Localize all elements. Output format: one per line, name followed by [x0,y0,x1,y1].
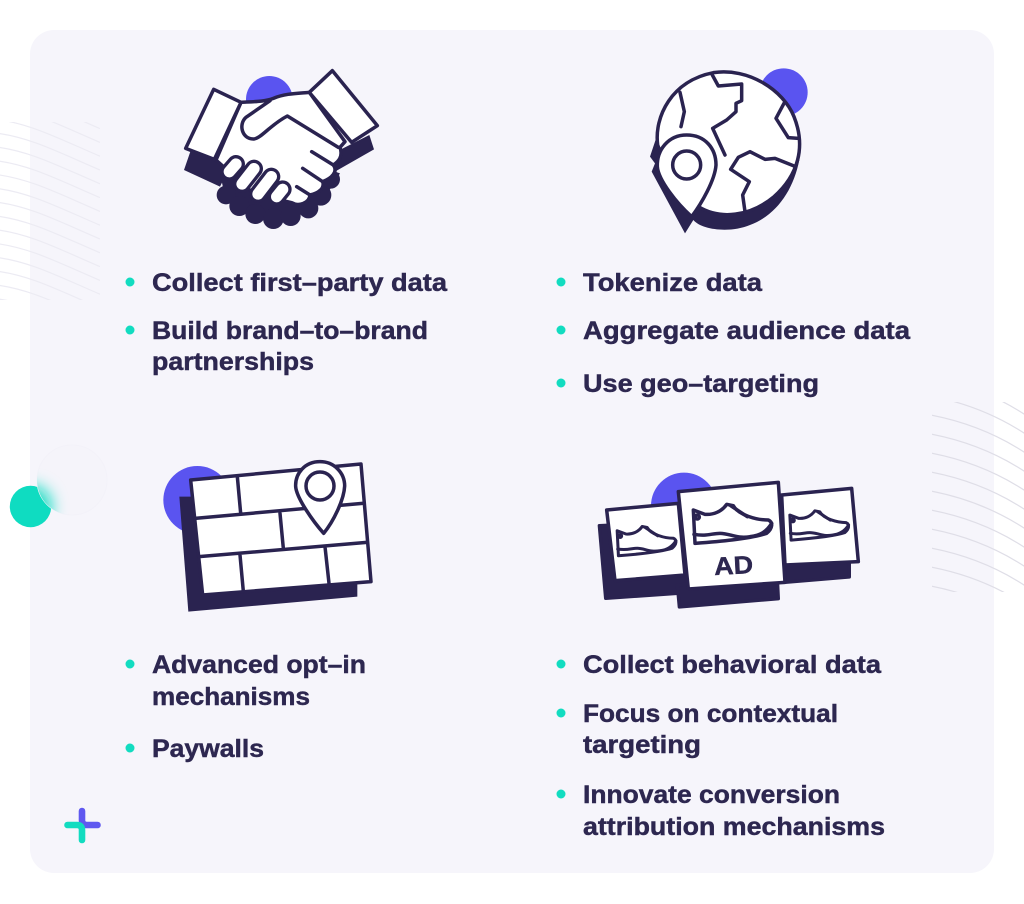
list: opt-in and paywalls [126,651,366,763]
list: data tokenization: Tokenize data [583,269,763,297]
list: data tokenization: Use geo–targeting [583,370,819,398]
ad label: AD [713,551,754,581]
list: first-party data: Build brand–to–brand [152,317,428,345]
list: first-party data [126,269,448,376]
list: opt-in and paywalls: Advanced opt–in [152,651,366,679]
list: first-party data: Collect first–party data [152,269,448,297]
list: opt-in and paywalls: mechanisms [152,683,310,711]
icon: handshake [184,71,377,229]
list: data tokenization [556,269,911,398]
list: opt-in and paywalls: Paywalls [152,735,264,763]
list: behavioral and contextual: Focus on contextual [583,700,838,728]
list: first-party data: partnerships [152,348,314,376]
icon: left shoe [617,526,676,556]
icon: right shoe [790,511,849,540]
list: behavioral and contextual: attribution mechanisms [583,813,885,841]
list: behavioral and contextual: Innovate conversion [583,781,840,809]
icon: center shoe [693,504,772,543]
list: data tokenization: Aggregate audience data [583,317,911,345]
icon: map with location pin [163,462,371,612]
list: behavioral and contextual: Collect behavioral data [583,651,882,679]
list: behavioral and contextual: targeting [583,731,701,759]
icon: globe with location pin [650,68,808,233]
decorative teal circle with frosted glass circle [10,473,64,528]
icon: ad cards with shoes [599,473,858,607]
logo [68,811,98,840]
list: behavioral and contextual [556,651,885,841]
